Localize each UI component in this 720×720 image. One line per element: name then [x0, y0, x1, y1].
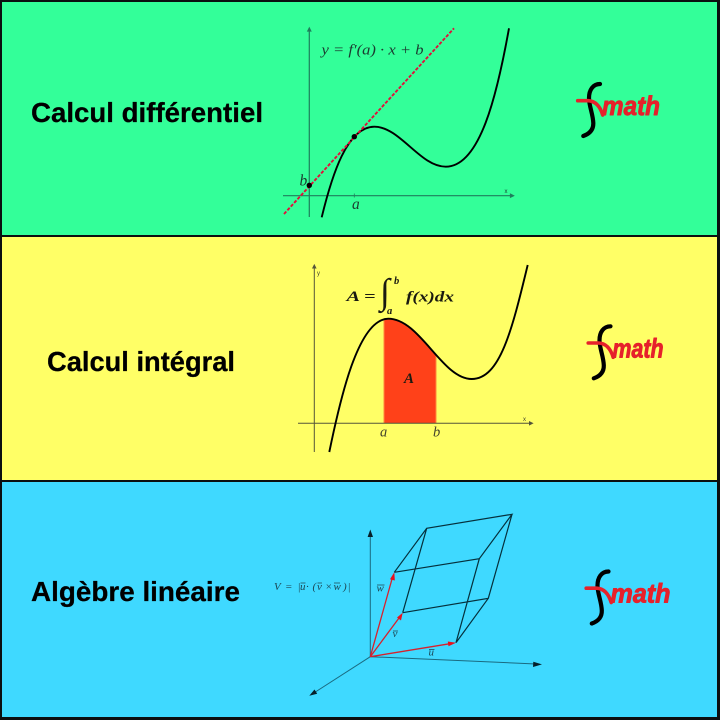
- panel: calcul intégral: [2, 237, 717, 480]
- axis labels: [317, 271, 526, 440]
- vector arrowheads: [390, 572, 456, 646]
- axis labels: a: [352, 196, 360, 213]
- vector labels: [376, 582, 434, 658]
- formula: V=|u·(v×w)|: [274, 581, 351, 593]
- chart: tangent line: [283, 28, 514, 217]
- vector labels: u: [428, 646, 434, 658]
- heading: calcul intégral: Calcul intégral: [47, 346, 235, 377]
- formula: b: [394, 276, 399, 287]
- shaded area: [384, 320, 436, 423]
- logo: fmath: math: [612, 333, 664, 363]
- panel: algèbre linéaire: [2, 482, 717, 717]
- formula: A =: [345, 289, 376, 305]
- axis labels: a: [380, 424, 387, 440]
- axis labels: x: [504, 189, 508, 195]
- axes: [283, 28, 514, 217]
- logo: fmath: [578, 84, 660, 136]
- formula: ∫: [378, 272, 392, 314]
- box edges: [394, 514, 512, 643]
- chart: parallelepiped: [274, 514, 542, 696]
- axes: [313, 534, 536, 694]
- area label: A: [403, 371, 414, 387]
- axis labels: b: [300, 172, 308, 190]
- formula: a: [387, 306, 392, 317]
- equation: y = f′(a) · x + b: [319, 42, 424, 58]
- logo: fmath: math: [610, 578, 670, 608]
- axis labels: x: [523, 417, 526, 423]
- heading: calcul différentiel: Calcul différentiel: [31, 97, 263, 128]
- heading: algèbre linéaire: Algèbre linéaire: [31, 576, 240, 607]
- logo: fmath: [588, 326, 664, 378]
- axes: [298, 265, 532, 452]
- formula: [345, 272, 454, 317]
- curve: [329, 265, 528, 452]
- tangent line: [284, 28, 454, 214]
- logo: fmath: math: [602, 91, 660, 121]
- axis labels: [300, 172, 508, 213]
- chart: integral: [298, 265, 532, 452]
- points: [307, 134, 357, 188]
- vector labels: w: [376, 582, 384, 594]
- vectors: [370, 579, 450, 657]
- formula: f(x)dx: [406, 290, 454, 306]
- panel: calcul différentiel: [2, 2, 717, 235]
- axis labels: y: [317, 271, 320, 277]
- curve: [322, 28, 509, 217]
- vector labels: v: [392, 628, 398, 640]
- logo: fmath: [586, 572, 670, 624]
- axis labels: b: [433, 424, 440, 440]
- axis arrowheads: [309, 530, 542, 696]
